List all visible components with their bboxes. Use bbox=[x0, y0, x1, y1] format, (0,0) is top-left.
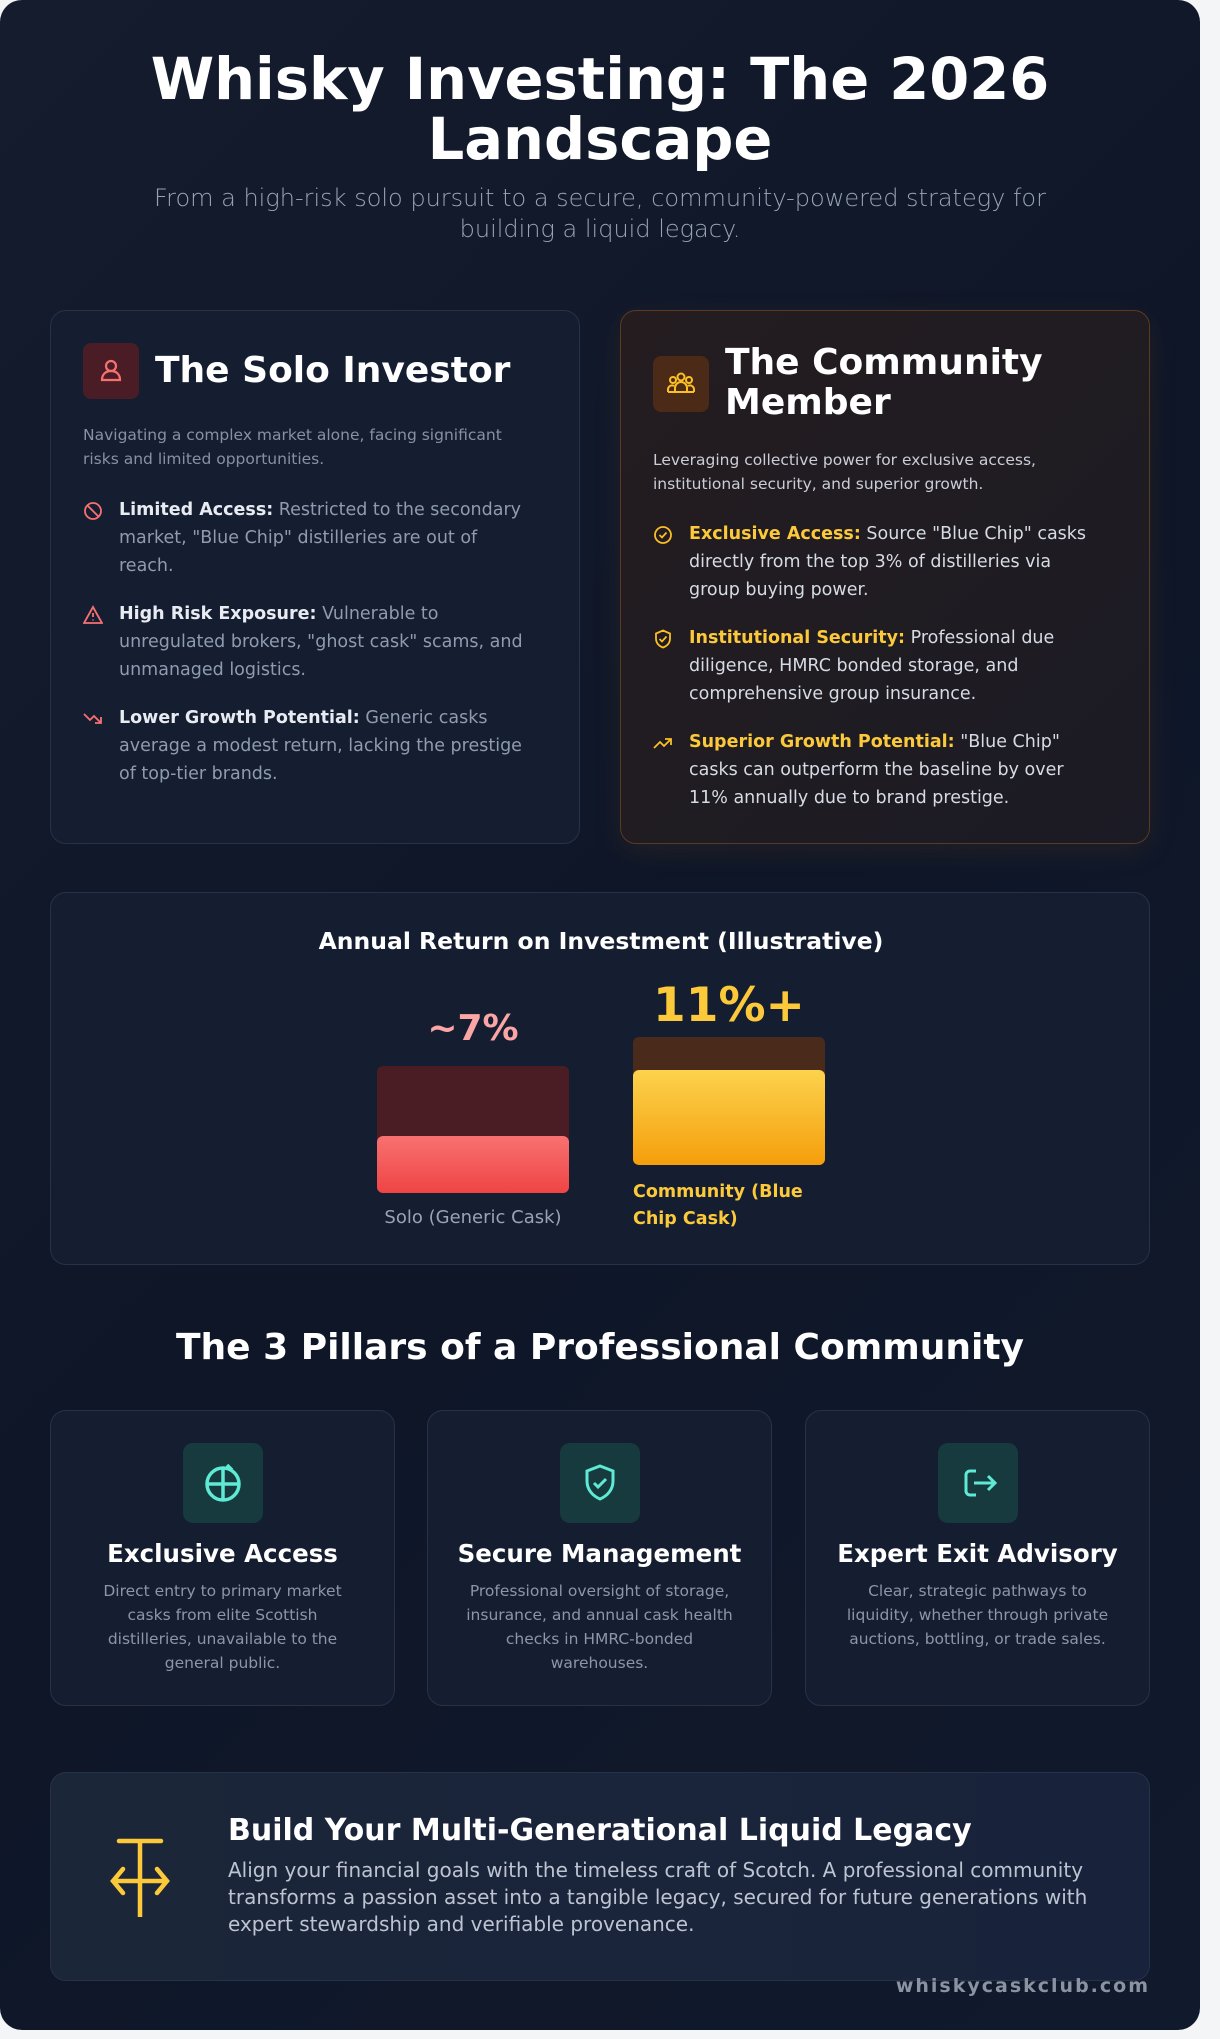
icon: anchor bbox=[110, 1838, 170, 1917]
pillar: secure management: Secure Management bbox=[458, 1539, 741, 1568]
panel: ROI chart bbox=[50, 892, 1150, 1265]
item: limited access: Limited Access: Restricted to the secondary market, "Blue Chip" distilleries are out of reach. bbox=[119, 500, 521, 576]
heading: The Community bbox=[725, 342, 1043, 383]
heading: Build Your Multi-Generational Liquid Legacy bbox=[228, 1813, 972, 1848]
footer: whiskycaskclub.com bbox=[896, 1975, 1150, 1997]
bar: community: 11%+ bbox=[653, 978, 805, 1033]
subtitle: From a high-risk solo pursuit to a secure, community-powered strategy for building a liquid legacy. bbox=[154, 184, 1046, 243]
panel: legacy callout bbox=[50, 1772, 1150, 1981]
heading bbox=[725, 342, 1043, 423]
pillar: secure management bbox=[427, 1410, 772, 1706]
pillar: expert exit advisory bbox=[805, 1410, 1150, 1706]
icon: shield bbox=[560, 1443, 640, 1523]
item: superior growth: Superior Growth Potential: "Blue Chip" casks can outperform the baseline by over 11% annually due to brand prestige. bbox=[689, 732, 1064, 808]
title: Landscape bbox=[428, 106, 772, 173]
item: lower growth: Lower Growth Potential: Generic casks average a modest return, lacking the prestige of top-tier brands. bbox=[119, 708, 522, 784]
pillar: secure management: Professional oversight of storage, insurance, and annual cask health checks in HMRC-bonded warehouses. bbox=[466, 1582, 733, 1672]
item: high risk: High Risk Exposure: Vulnerable to unregulated brokers, "ghost cask" scams, and unmanaged logistics. bbox=[119, 604, 523, 680]
description: Navigating a complex market alone, facing significant risks and limited opportunities. bbox=[83, 426, 502, 468]
bar: solo bbox=[377, 1008, 569, 1228]
icon: group bbox=[653, 356, 709, 412]
heading: Member bbox=[725, 382, 891, 423]
pillar: expert exit advisory: Expert Exit Advisory bbox=[837, 1539, 1118, 1568]
pillar: exclusive access: Direct entry to primary market casks from elite Scottish distilleries, unavailable to the general public. bbox=[103, 1582, 342, 1672]
icon: exit bbox=[938, 1443, 1018, 1523]
item: institutional security: Institutional Security: Professional due diligence, HMRC bonded storage, and comprehensive group insurance. bbox=[689, 628, 1054, 704]
title bbox=[151, 46, 1049, 173]
heading: The Solo Investor bbox=[155, 350, 510, 391]
icon: person bbox=[83, 343, 139, 399]
panel: solo investor bbox=[50, 310, 580, 844]
pillar: exclusive access: Exclusive Access bbox=[107, 1539, 338, 1568]
item: exclusive access: Exclusive Access: Source "Blue Chip" casks directly from the top 3% of distilleries via group buying power. bbox=[689, 524, 1086, 600]
bar: community: Community (Blue Chip Cask) bbox=[633, 1182, 803, 1229]
bar: community bbox=[633, 978, 825, 1229]
panel: community member bbox=[620, 310, 1150, 844]
description: Leveraging collective power for exclusive access, institutional security, and superior growth. bbox=[653, 451, 1036, 493]
text: Align your financial goals with the timeless craft of Scotch. A professional community transforms a passion asset into a tangible legacy, secured for future generations with expert stewardship and verifiable provenance. bbox=[228, 1858, 1087, 1936]
heading: pillars: The 3 Pillars of a Professional Community bbox=[176, 1327, 1024, 1368]
pillar: exclusive access bbox=[50, 1410, 395, 1706]
bar: solo: Solo (Generic Cask) bbox=[384, 1207, 562, 1228]
icon: target bbox=[183, 1443, 263, 1523]
pillar: expert exit advisory: Clear, strategic pathways to liquidity, whether through private auctions, bottling, or trade sales. bbox=[847, 1582, 1108, 1648]
chart title: Annual Return on Investment (Illustrative) bbox=[319, 927, 883, 955]
bar: solo: ~7% bbox=[427, 1008, 519, 1049]
title: Whisky Investing: The 2026 bbox=[151, 46, 1049, 113]
